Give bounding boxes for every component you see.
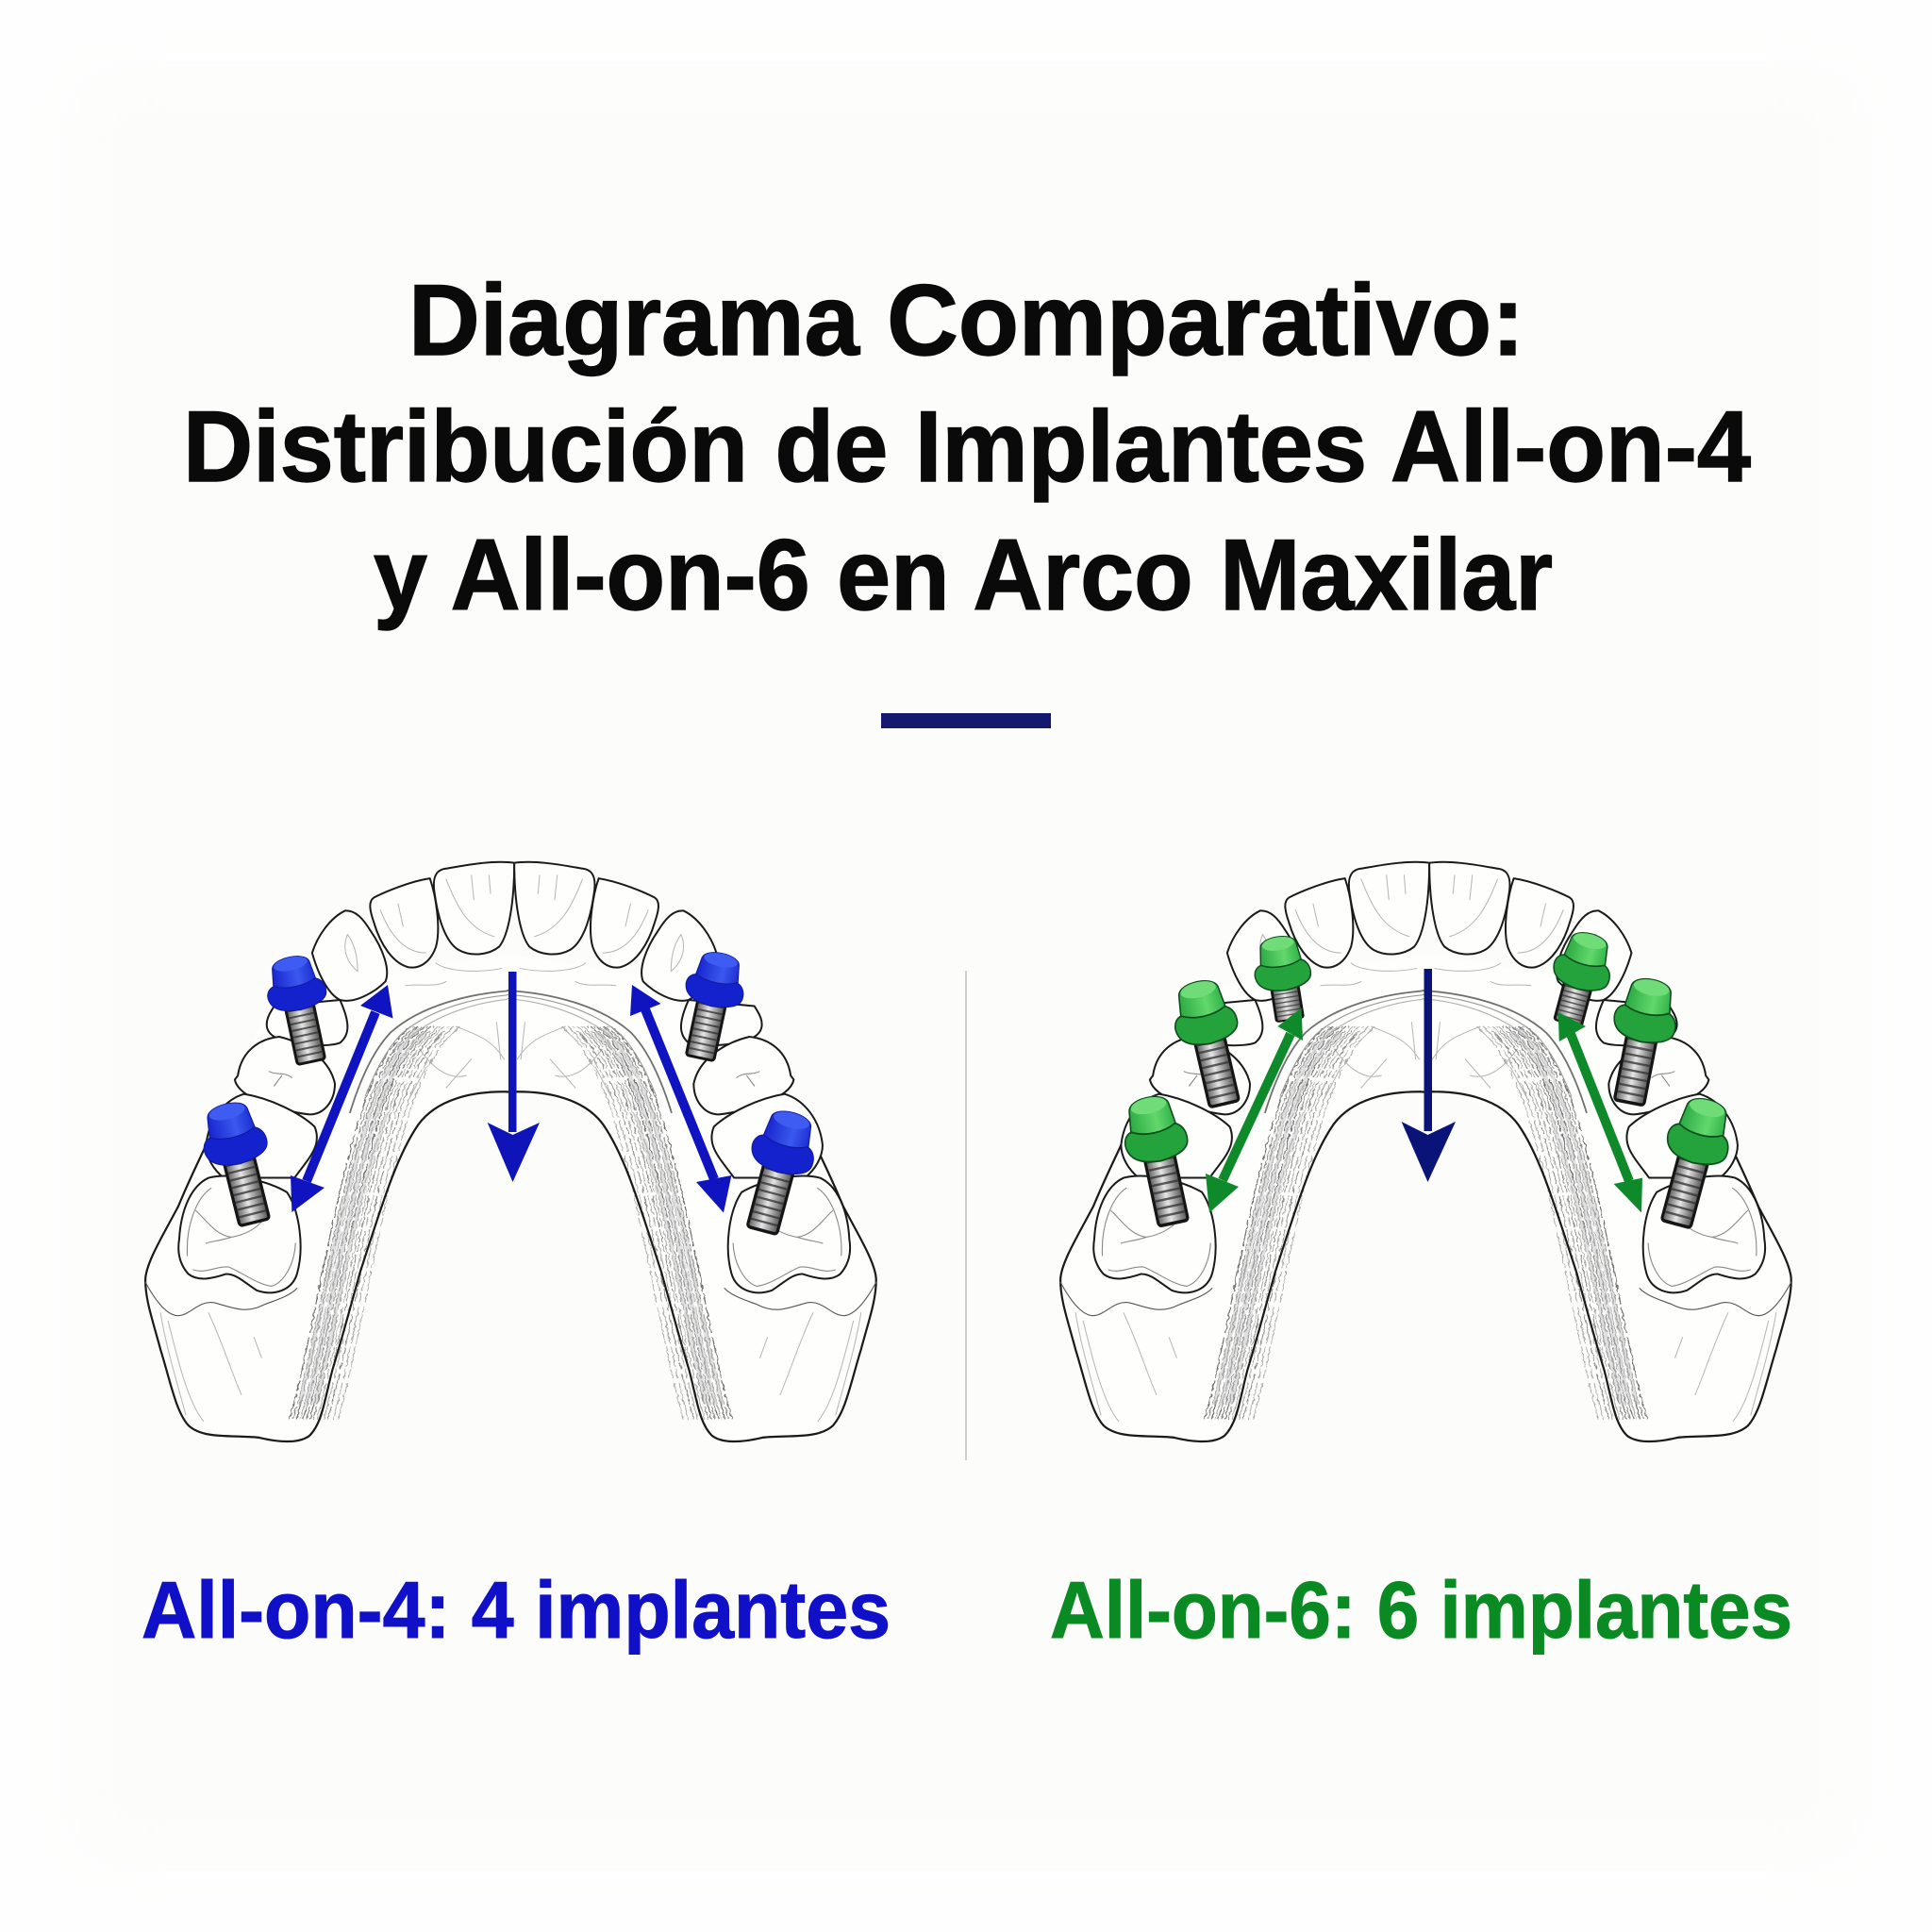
implant: inner left green xyxy=(1249,933,1318,1024)
label: All-on-4: All-on-4: 4 implantes xyxy=(142,1566,891,1656)
title: Diagrama Comparativo: xyxy=(408,263,1524,376)
title: Distribución de Implantes All-on-4 xyxy=(183,390,1751,503)
arrow: central blue xyxy=(488,972,540,1182)
implant: lower left blue xyxy=(194,1096,286,1230)
dental arch drawing right xyxy=(1060,862,1791,1441)
implant: lower left green xyxy=(1117,1091,1204,1229)
implant: upper left blue xyxy=(260,951,340,1068)
panel divider xyxy=(965,971,967,1460)
title xyxy=(183,263,1751,631)
arrow: right spread blue xyxy=(630,985,731,1213)
implant: upper right blue xyxy=(672,947,751,1064)
panel: All-on-4 arch xyxy=(145,862,876,1441)
title accent divider xyxy=(881,713,1051,728)
arrow: left spread green xyxy=(1206,1008,1303,1213)
dental arch drawing left xyxy=(145,862,876,1441)
implant: upper left green xyxy=(1166,975,1255,1110)
title: y All-on-6 en Arco Maxilar xyxy=(374,518,1553,631)
implant: upper right green xyxy=(1599,974,1684,1108)
arrow: left spread blue xyxy=(291,985,392,1212)
arrow: central navy xyxy=(1402,969,1456,1182)
arrow: right spread green xyxy=(1558,1012,1642,1213)
implant: inner right green xyxy=(1541,926,1620,1030)
implant: lower right green xyxy=(1646,1092,1740,1232)
panel: All-on-6 arch xyxy=(1060,862,1791,1441)
label: All-on-6: All-on-6: 6 implantes xyxy=(1050,1566,1792,1656)
implant: lower right blue xyxy=(731,1105,824,1239)
